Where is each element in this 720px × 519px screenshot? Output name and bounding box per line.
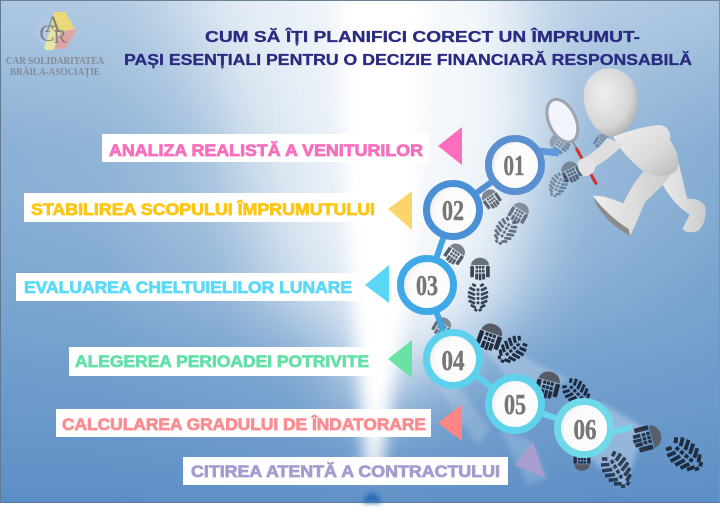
arrow: pink [438, 127, 462, 165]
label: citirea contractului [183, 457, 508, 485]
title [124, 28, 692, 69]
logo hexagon mark: A [45, 12, 62, 37]
light beams behind footprints [435, 330, 645, 488]
label: stabilirea scopului: STABILIREA SCOPULUI ÎMPRUMUTULUI [31, 200, 375, 219]
step 01 [488, 138, 542, 192]
torso [613, 125, 678, 176]
step 02: 02 [442, 195, 464, 227]
arrow: cyan [365, 265, 389, 303]
arrow: salmon [438, 404, 462, 441]
back leg [657, 162, 706, 232]
figure: 3D man with magnifying glass [541, 68, 706, 236]
head [584, 68, 638, 136]
label: analiza veniturilor: ANALIZA REALISTĂ A VENITURILOR [109, 141, 423, 160]
arm [581, 138, 623, 169]
shoe sole [593, 196, 630, 236]
label: citirea contractului: CITIREA ATENTĂ A CONTRACTULUI [191, 462, 500, 481]
arrow: purple [515, 442, 545, 478]
label: gradul de indatorare [56, 409, 431, 437]
front leg and foot [593, 170, 672, 236]
step 06 [558, 402, 610, 454]
label: evaluarea cheltuielilor [16, 273, 360, 301]
label: stabilirea scopului [24, 193, 382, 222]
magnifying glass [541, 94, 596, 183]
label: alegerea perioadei [69, 347, 379, 376]
step 06: 06 [574, 414, 596, 446]
step 01: 01 [504, 150, 524, 182]
step 02 [426, 184, 480, 236]
title: CUM SĂ ÎȚI PLANIFICI CORECT UN ÎMPRUMUT- [205, 28, 640, 46]
logo name: CAR SOLIDARITATEA [6, 56, 104, 67]
title: PAȘI ESENȚIALI PENTRU O DECIZIE FINANCIARĂ RESPONSABILĂ [124, 52, 692, 69]
logo name [6, 56, 104, 78]
step 05 [488, 378, 542, 430]
logo name: BRĂILA-ASOCIAȚIE [10, 66, 100, 78]
logo hexagon mark [33, 12, 75, 50]
label: gradul de indatorare: CALCULAREA GRADULUI DE ÎNDATORARE [62, 415, 426, 434]
step 05: 05 [504, 389, 526, 421]
logo [6, 12, 104, 78]
arrow: green [388, 340, 412, 378]
label: evaluarea cheltuielilor: EVALUAREA CHELTUIELILOR LUNARE [24, 279, 352, 297]
connector lines [427, 151, 632, 432]
logo hexagon mark: R [53, 26, 67, 48]
step 03 [400, 258, 454, 312]
step 04 [426, 332, 480, 386]
step 03: 03 [416, 270, 438, 302]
footprints [430, 130, 709, 492]
logo hexagon mark: C [39, 21, 55, 46]
label: alegerea perioadei: ALEGEREA PERIOADEI POTRIVITE [75, 353, 369, 371]
label: analiza veniturilor [102, 134, 429, 162]
hand [578, 158, 596, 176]
step 04: 04 [442, 345, 464, 377]
arrow: yellow [388, 191, 412, 230]
